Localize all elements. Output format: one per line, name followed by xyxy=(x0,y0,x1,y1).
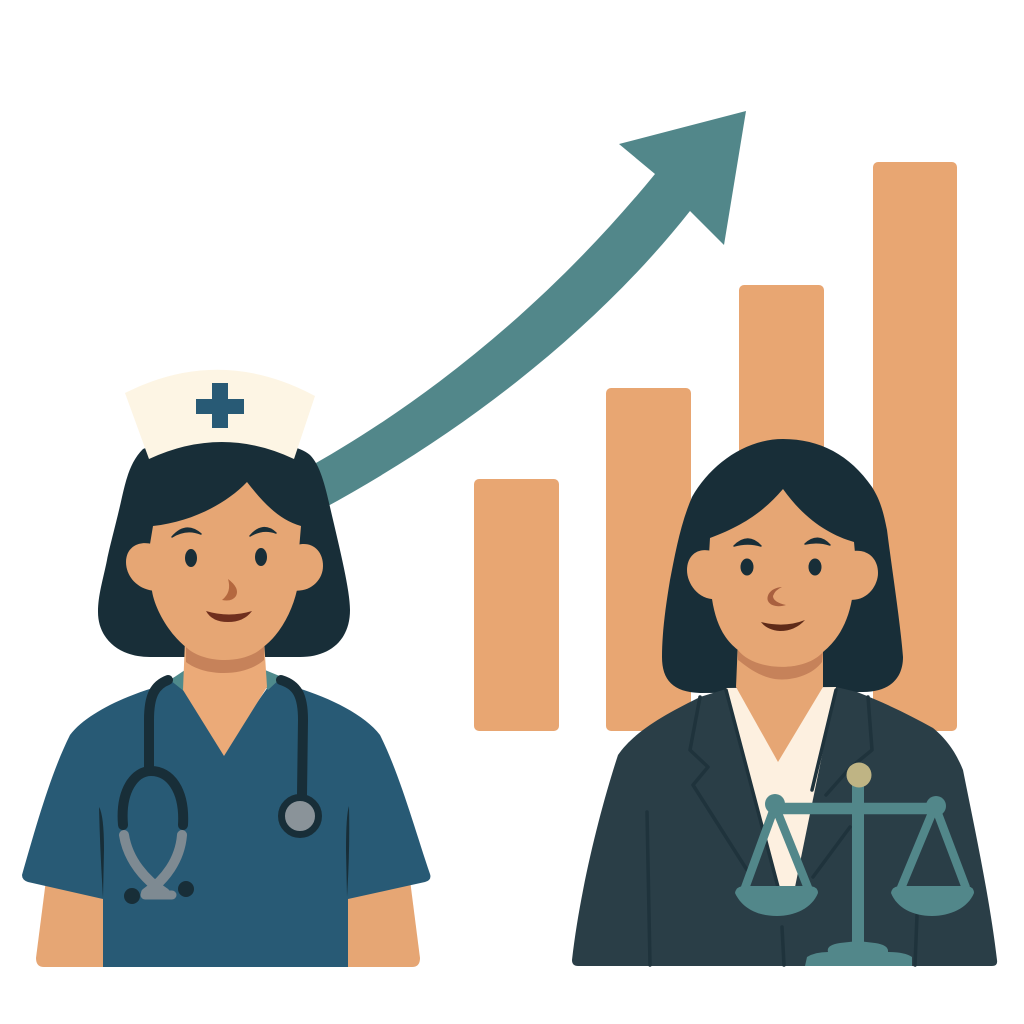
nurse scrubs xyxy=(22,677,430,967)
nurse neck xyxy=(183,640,267,756)
lawyer hair xyxy=(662,439,903,693)
scales post and beam xyxy=(745,780,966,945)
nurse facial features xyxy=(172,528,276,622)
nurse hair xyxy=(98,440,350,657)
lawyer suit xyxy=(572,687,997,966)
lawyer blouse xyxy=(726,687,836,887)
stethoscope xyxy=(123,680,318,900)
scrub folds xyxy=(99,806,349,898)
rising arrow xyxy=(300,111,746,513)
scales pans and base xyxy=(735,794,974,966)
nurse face xyxy=(149,482,301,660)
lawyer lapels xyxy=(647,690,917,965)
lawyer ears xyxy=(687,550,878,600)
nurse cap xyxy=(125,370,315,459)
cap cross xyxy=(196,383,244,428)
nurse arms xyxy=(36,880,420,967)
nurse collar xyxy=(170,670,282,692)
nurse ears xyxy=(126,543,323,591)
lawyer face xyxy=(709,489,855,667)
lawyer neck xyxy=(736,640,823,762)
bar chart xyxy=(474,162,957,731)
figure: lawyer xyxy=(572,439,997,966)
scales pin xyxy=(846,762,872,788)
figure: nurse xyxy=(22,370,430,967)
lawyer facial features xyxy=(734,538,830,631)
scales of justice xyxy=(735,762,974,966)
